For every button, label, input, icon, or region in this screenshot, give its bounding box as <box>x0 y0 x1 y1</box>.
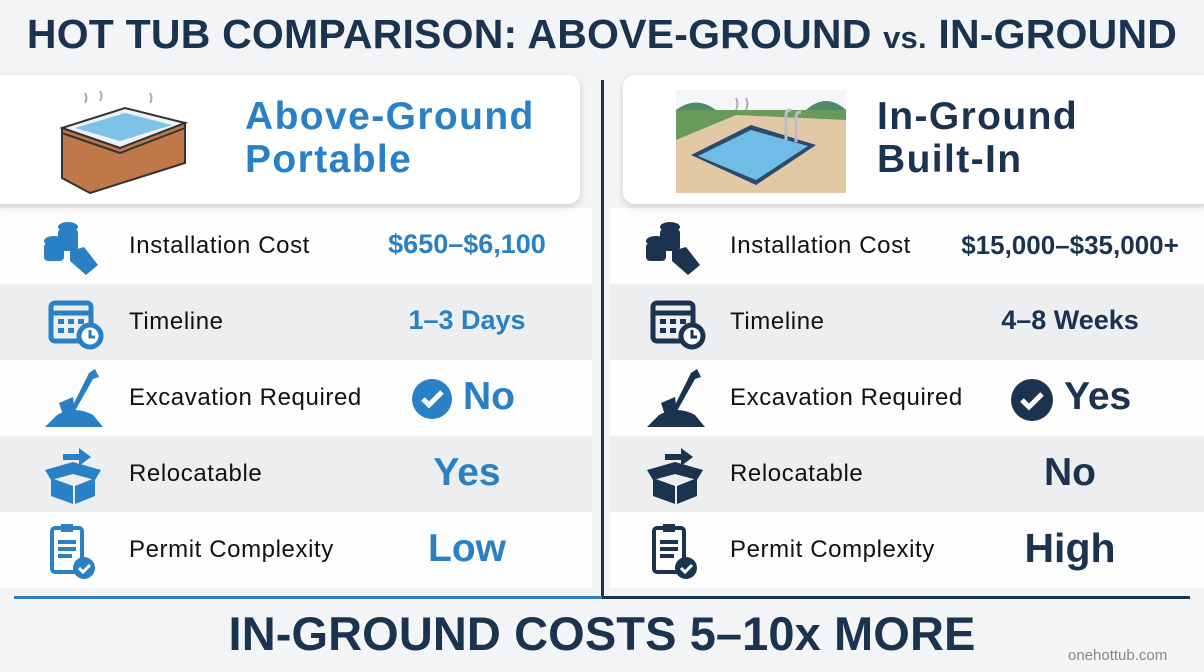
row: permit: Permit Complexity <box>730 536 935 563</box>
row: permit: Low <box>428 527 506 570</box>
icon: portable hot tub <box>60 90 188 194</box>
row: excavation <box>647 369 1131 427</box>
row: relocatable: Yes <box>433 451 501 494</box>
row: relocatable <box>45 448 501 504</box>
row: installation cost: Installation Cost <box>129 232 310 259</box>
bottom lines <box>14 596 602 599</box>
watermark: onehottub.com <box>1068 647 1167 664</box>
row: permit <box>50 524 506 579</box>
row: installation cost: $650–$6,100 <box>388 229 546 259</box>
row: permit: High <box>1024 525 1116 571</box>
heading: above-ground portable <box>245 95 535 181</box>
icon: in-ground pool <box>676 90 846 193</box>
heading: above-ground portable: Portable <box>245 138 412 181</box>
row: excavation: Excavation Required <box>129 384 362 411</box>
heading: in-ground built-in: Built-In <box>877 138 1022 181</box>
panel: in-ground <box>610 75 1204 588</box>
heading: in-ground built-in <box>877 95 1078 181</box>
value: check no: No <box>463 375 515 418</box>
row: installation cost <box>646 222 1179 275</box>
title: HOT TUB COMPARISON: ABOVE-GROUND vs. IN-GROUND <box>27 11 1177 57</box>
row: timeline: 4–8 Weeks <box>1001 305 1139 335</box>
row: relocatable: Relocatable <box>129 460 262 487</box>
row: installation cost: $15,000–$35,000+ <box>961 230 1179 260</box>
row: installation cost <box>44 222 546 275</box>
rows background <box>610 208 1204 588</box>
value: check yes <box>1011 375 1131 421</box>
row: permit <box>652 524 1116 579</box>
value: check no <box>412 375 515 419</box>
footer headline: IN-GROUND COSTS 5–10x MORE <box>229 607 975 660</box>
divider <box>601 80 604 597</box>
row: relocatable <box>647 448 1096 504</box>
row: timeline: 1–3 Days <box>408 305 526 335</box>
row: timeline: Timeline <box>730 308 825 335</box>
rows background <box>0 208 592 588</box>
row: relocatable: Relocatable <box>730 460 863 487</box>
heading: above-ground portable: Above-Ground <box>245 95 535 138</box>
row: timeline <box>650 300 1139 350</box>
row: excavation <box>45 369 515 427</box>
row: timeline: Timeline <box>129 308 224 335</box>
row: installation cost: Installation Cost <box>730 232 911 259</box>
row: excavation: Excavation Required <box>730 384 963 411</box>
value: check yes: Yes <box>1064 375 1131 418</box>
row: permit: Permit Complexity <box>129 536 334 563</box>
header card: in-ground <box>623 75 1204 204</box>
row: timeline <box>48 300 526 350</box>
row: relocatable: No <box>1044 451 1096 494</box>
panel: above-ground <box>0 75 592 588</box>
header card: above-ground <box>0 75 580 204</box>
heading: in-ground built-in: In-Ground <box>877 95 1078 138</box>
